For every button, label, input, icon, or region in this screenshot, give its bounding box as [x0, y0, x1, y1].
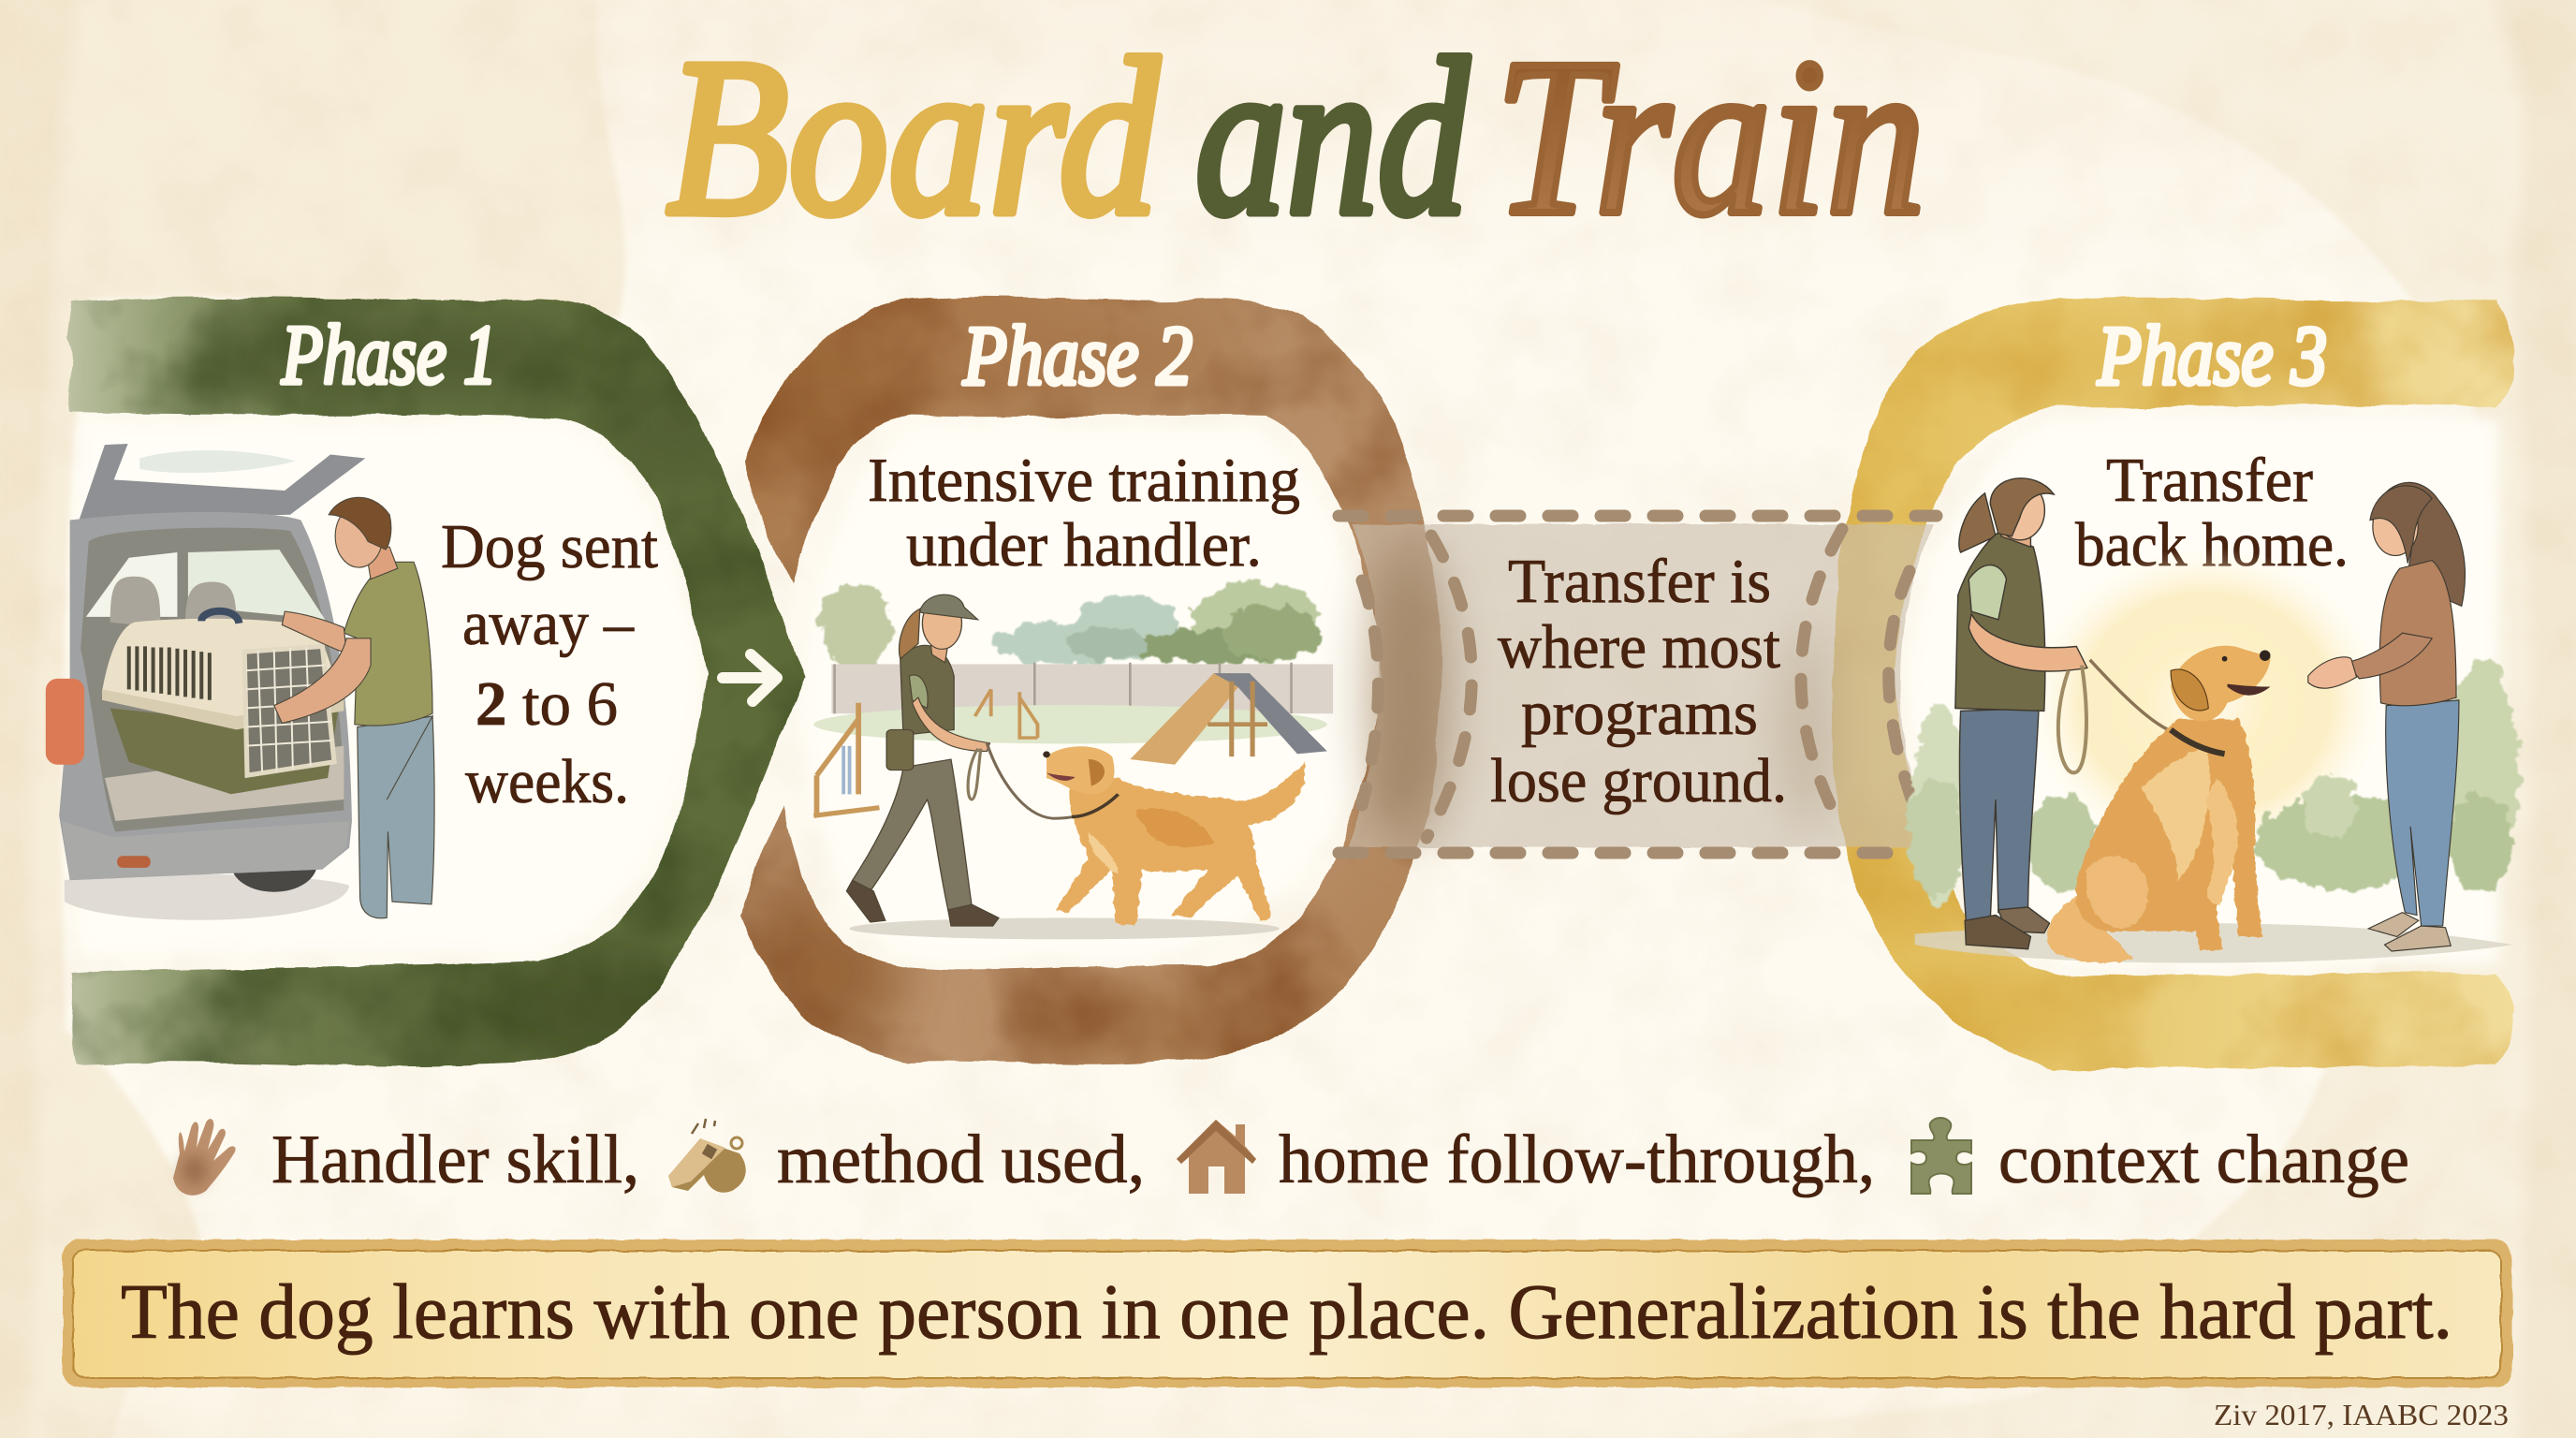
- transfer text: programs: [1521, 679, 1758, 748]
- text: context change: context change: [1998, 1122, 2409, 1198]
- citation: Ziv 2017, IAABC 2023: [2214, 1398, 2509, 1431]
- phase 3 band: [1833, 298, 2514, 1070]
- phase 3 text: back home.: [2075, 510, 2349, 580]
- icon: hand: [173, 1119, 236, 1196]
- factors row: [173, 1118, 2409, 1198]
- transfer text: Transfer is: [1508, 547, 1771, 616]
- text: home follow-through: home follow-through,: [1279, 1122, 1875, 1198]
- title: Train: [1495, 12, 1925, 261]
- title: and: [1195, 12, 1470, 261]
- banner text: The dog learns with one person in one place. Generalization is the hard part.: [121, 1269, 2452, 1356]
- phase 1 text: 2 to 6: [476, 669, 618, 739]
- text: method used: method used,: [777, 1122, 1145, 1198]
- text: handler skill: Handler skill,: [271, 1122, 639, 1198]
- phase labels: Phase 3: [2097, 310, 2327, 403]
- interior panels: [80, 418, 2499, 964]
- dog walking: [1056, 762, 1305, 926]
- owner: [2308, 482, 2465, 951]
- phase 3 text: [2075, 446, 2349, 580]
- phase 2 band: [739, 297, 1451, 1064]
- phase 1 text: Dog sent: [441, 512, 658, 581]
- phase 1 text: weeks.: [465, 747, 629, 816]
- phase 2 text: [868, 446, 1300, 580]
- handler: [846, 594, 999, 926]
- phase 2 illustration: handler walking dog at training yard: [813, 582, 1333, 939]
- phase 2 text: under handler.: [906, 510, 1262, 580]
- phase 1 text: away –: [462, 589, 634, 658]
- transfer text: [1490, 547, 1787, 815]
- phase labels: Phase 1: [281, 309, 497, 402]
- phase 1 text: [441, 512, 658, 816]
- arrow: [723, 654, 777, 701]
- phase labels: [281, 309, 2327, 403]
- takeaway banner: [63, 1240, 2512, 1387]
- phase 1 illustration: man loading crate into car: [46, 444, 434, 920]
- transfer text: lose ground.: [1490, 746, 1787, 815]
- icon: whistle: [668, 1119, 746, 1193]
- man: [274, 497, 434, 918]
- dog sitting: [2047, 646, 2271, 962]
- phase 2 text: Intensive training: [868, 446, 1300, 515]
- title: Board: [666, 12, 1160, 261]
- phase 1 band: [66, 298, 804, 1067]
- phase labels: Phase 2: [962, 310, 1193, 403]
- trainer: [1955, 478, 2087, 949]
- title: [666, 12, 1925, 261]
- phase 3 illustration: handler passing dog to owner: [1907, 478, 2518, 963]
- transfer text: where most: [1498, 612, 1780, 682]
- transfer bridge panel: [1339, 516, 1937, 853]
- icon: puzzle piece: [1911, 1118, 1971, 1194]
- phase 3 text: Transfer: [2106, 446, 2313, 515]
- icon: house: [1177, 1120, 1256, 1194]
